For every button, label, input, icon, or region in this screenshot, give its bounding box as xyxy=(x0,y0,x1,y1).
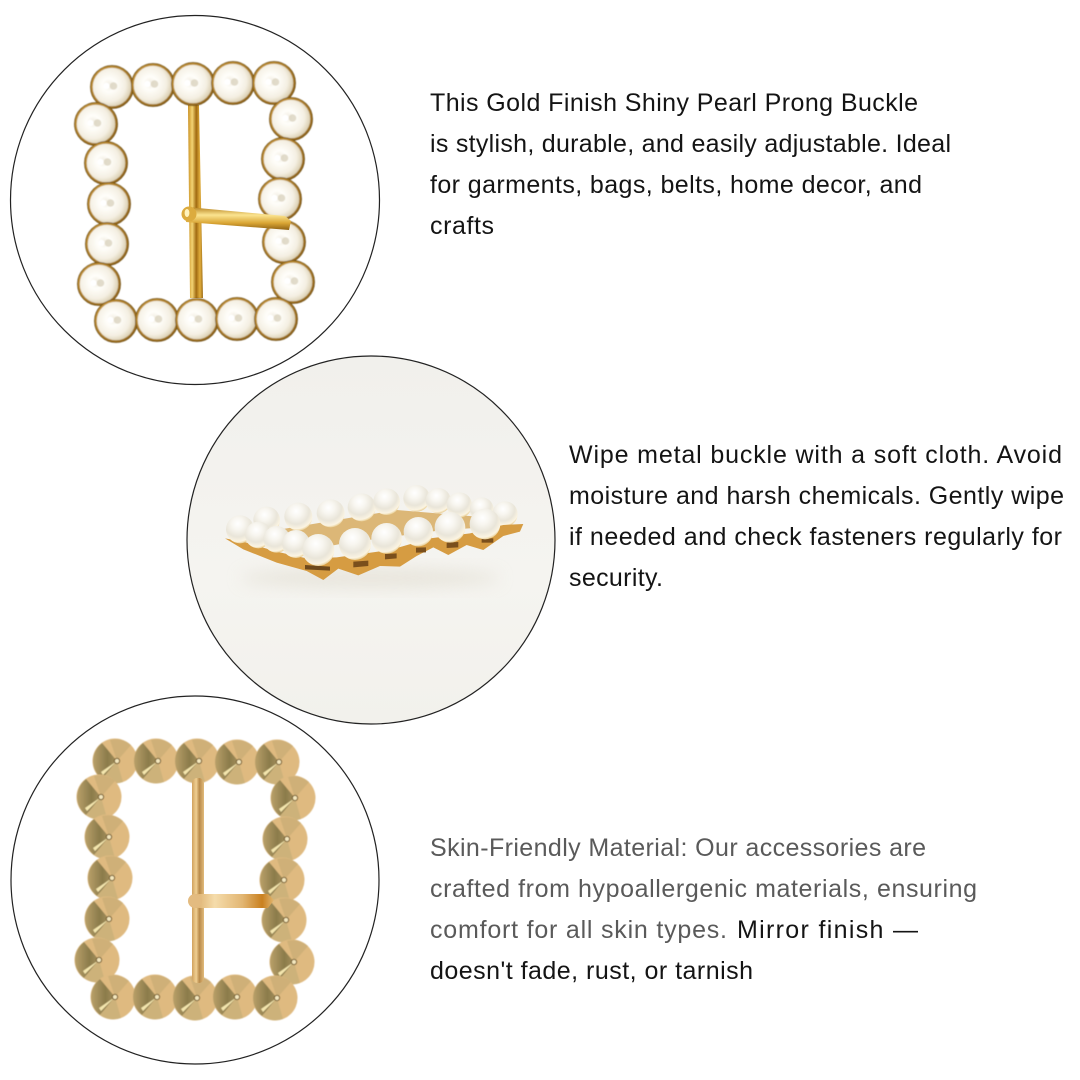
text block: care instructions: if needed and check fasteners regularly for xyxy=(569,523,1062,551)
icon: buckle centre bar xyxy=(188,105,203,298)
icon: pearl frame xyxy=(74,62,314,342)
icon: side-view pearl buckle xyxy=(225,485,523,580)
circle: pearl buckle side view xyxy=(187,356,555,724)
icon: buckle prong xyxy=(188,894,274,908)
text block: material and finish: Skin-Friendly Material: Our accessories are xyxy=(430,834,926,862)
text block: care instructions: security. xyxy=(569,564,663,592)
text block: care instructions: moisture and harsh chemicals. Gently wipe xyxy=(569,482,1064,510)
text block: product description: is stylish, durable, and easily adjustable. Ideal xyxy=(430,130,951,158)
shadow under buckle xyxy=(240,568,500,588)
text block: material and finish xyxy=(430,834,977,985)
text block: material and finish: doesn't fade, rust, or tarnish xyxy=(430,957,753,985)
circle: pearl buckle front view xyxy=(10,16,380,384)
text block: product description: for garments, bags, belts, home decor, and xyxy=(430,171,922,199)
text block: product description: crafts xyxy=(430,212,494,240)
text block: material and finish: crafted from hypoallergenic materials, ensuring xyxy=(430,875,977,903)
text block: care instructions xyxy=(569,441,1064,592)
icon: buckle centre bar xyxy=(192,778,204,983)
icon: gold disc frame xyxy=(74,738,316,1020)
text block: product description xyxy=(430,89,951,240)
icon: buckle prong xyxy=(182,206,291,230)
text block: care instructions: Wipe metal buckle with a soft cloth. Avoid xyxy=(569,441,1062,469)
text block: material and finish: Mirror finish — xyxy=(737,916,918,944)
text block: material and finish: comfort for all skin types. xyxy=(430,916,727,944)
circle: buckle back view xyxy=(11,696,379,1064)
text block: product description: This Gold Finish Shiny Pearl Prong Buckle xyxy=(430,89,918,117)
